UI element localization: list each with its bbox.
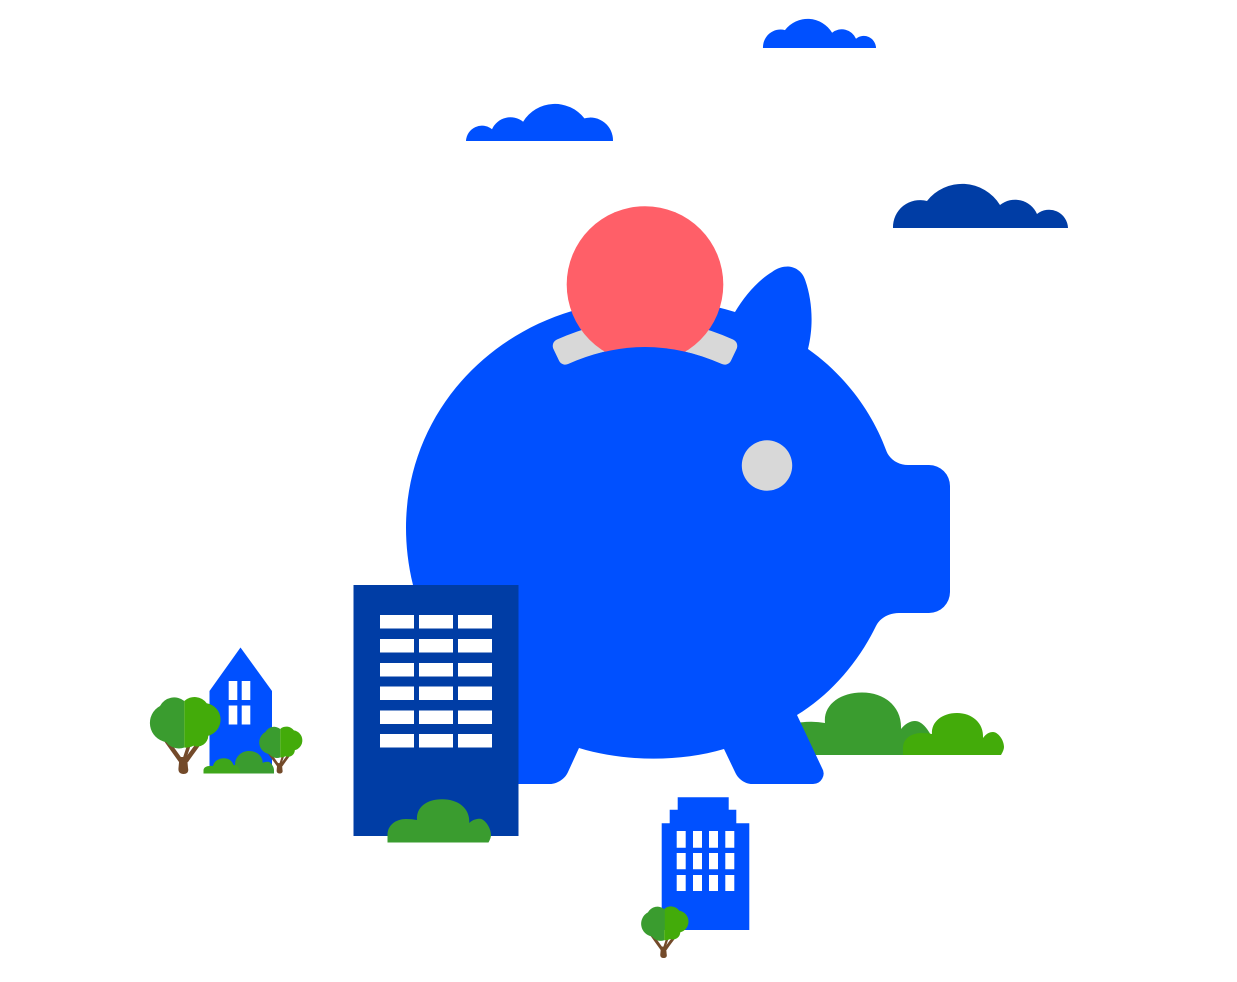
cloud: right dark blue	[893, 184, 1068, 228]
pig body	[406, 266, 950, 784]
tree: large	[150, 697, 221, 774]
office windows	[677, 831, 734, 891]
house	[210, 648, 272, 773]
bush: behind pig, dark	[790, 692, 935, 755]
tree: small	[259, 727, 302, 774]
piggy bank	[406, 206, 950, 784]
pig back covering the coin	[569, 347, 721, 400]
bush: house, dark right part	[235, 751, 274, 774]
office body	[662, 797, 749, 930]
building body	[354, 585, 518, 836]
coin slot	[553, 320, 737, 365]
small blue office building with tree	[641, 797, 749, 958]
cloud: top right blue	[763, 19, 876, 48]
bush: behind pig, light	[903, 713, 1004, 755]
pig eye	[742, 440, 792, 491]
house with trees and bush	[150, 648, 302, 774]
bush: house, lighter left part	[204, 758, 240, 774]
coin	[567, 206, 723, 363]
tree: by office	[641, 906, 688, 958]
cloud: centre blue	[466, 104, 613, 141]
bush: building base	[388, 799, 491, 842]
building windows	[380, 615, 492, 748]
tall dark office building	[354, 585, 518, 842]
